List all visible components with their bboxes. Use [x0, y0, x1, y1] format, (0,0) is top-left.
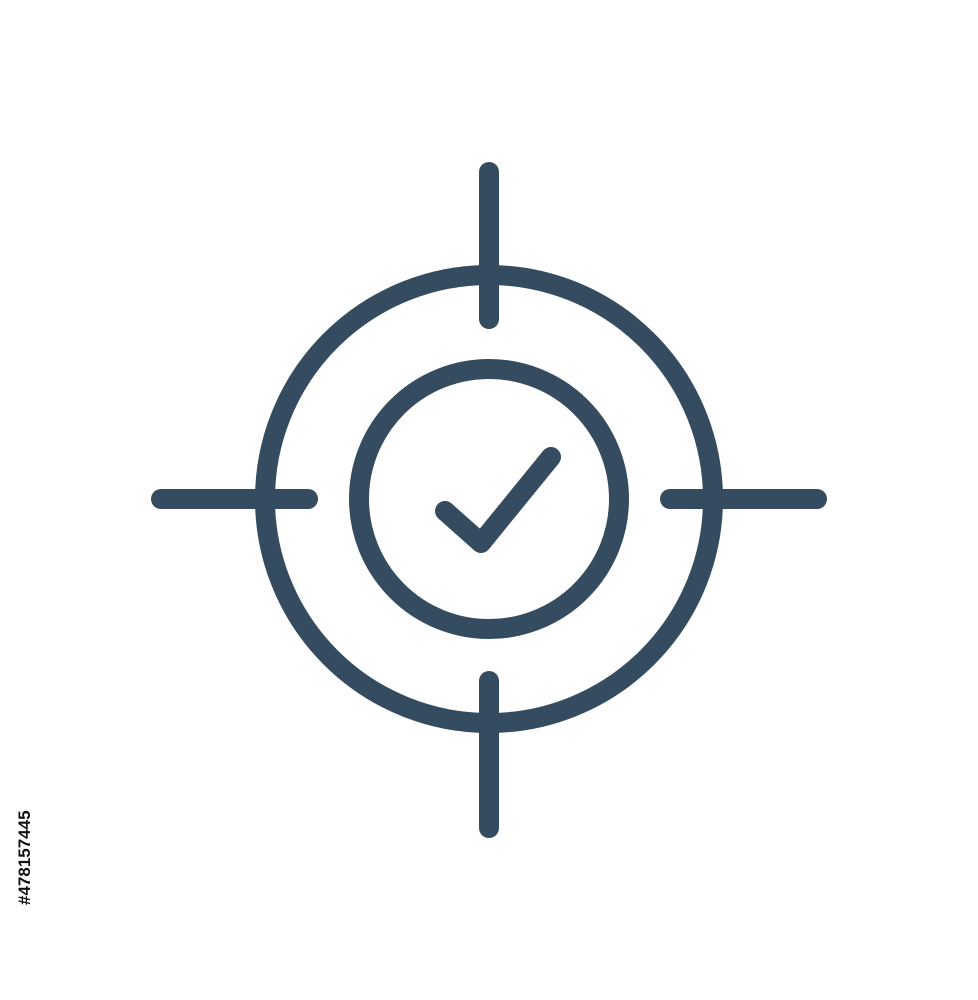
crosshair ticks: [161, 172, 817, 828]
stock id text: #478157445: [15, 810, 34, 905]
inner circle: [359, 369, 619, 629]
check mark: [445, 457, 551, 543]
outer circle: [265, 275, 713, 723]
